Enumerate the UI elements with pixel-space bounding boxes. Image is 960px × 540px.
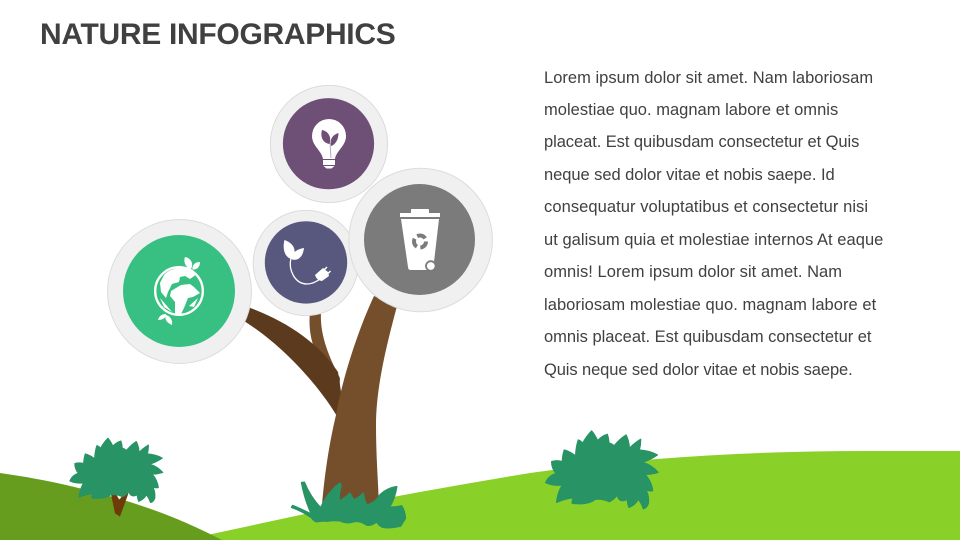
circle: green plug — [253, 210, 358, 316]
text block: Quis neque sed dolor vitae et nobis saepe. — [544, 361, 853, 379]
circle: recycling bin — [349, 168, 492, 312]
text block: omnis placeat. Est quibusdam consectetur et — [544, 328, 871, 346]
trunk — [322, 296, 397, 505]
left branch — [244, 306, 346, 425]
text block: Lorem ipsum dolor sit amet. Nam laboriosam — [544, 68, 873, 86]
text block: consequatur voluptatibus et consectetur nisi — [544, 198, 868, 216]
text block: molestiae quo. magnam labore et omnis — [544, 101, 838, 119]
text block: omnis! Lorem ipsum dolor sit amet. Nam — [544, 263, 842, 281]
right bush — [546, 431, 658, 509]
text block — [544, 68, 883, 379]
text block: laboriosam molestiae quo. magnam labore et — [544, 296, 876, 314]
grass tuft — [292, 482, 405, 528]
text block: placeat. Est quibusdam consectetur et Quis — [544, 133, 859, 151]
bush stem — [111, 493, 129, 517]
icon: leaf and plug — [284, 240, 330, 284]
title: NATURE INFOGRAPHICS — [40, 18, 395, 51]
icon: recycling bin — [400, 209, 440, 271]
text block: ut galisum quia et molestiae internos At eaque — [544, 231, 883, 249]
left bush — [70, 438, 163, 517]
icon: globe with leaves — [155, 257, 203, 325]
dark green hill — [0, 473, 222, 540]
middle branch — [310, 312, 340, 420]
text block: neque sed dolor vitae et nobis saepe. Id — [544, 166, 835, 184]
circle: idea bulb — [270, 85, 388, 203]
light green hill — [190, 451, 960, 540]
circle: earth — [108, 220, 252, 364]
bush foliage — [70, 438, 163, 502]
icon: light bulb with sprout — [312, 119, 346, 168]
tree — [244, 296, 397, 505]
